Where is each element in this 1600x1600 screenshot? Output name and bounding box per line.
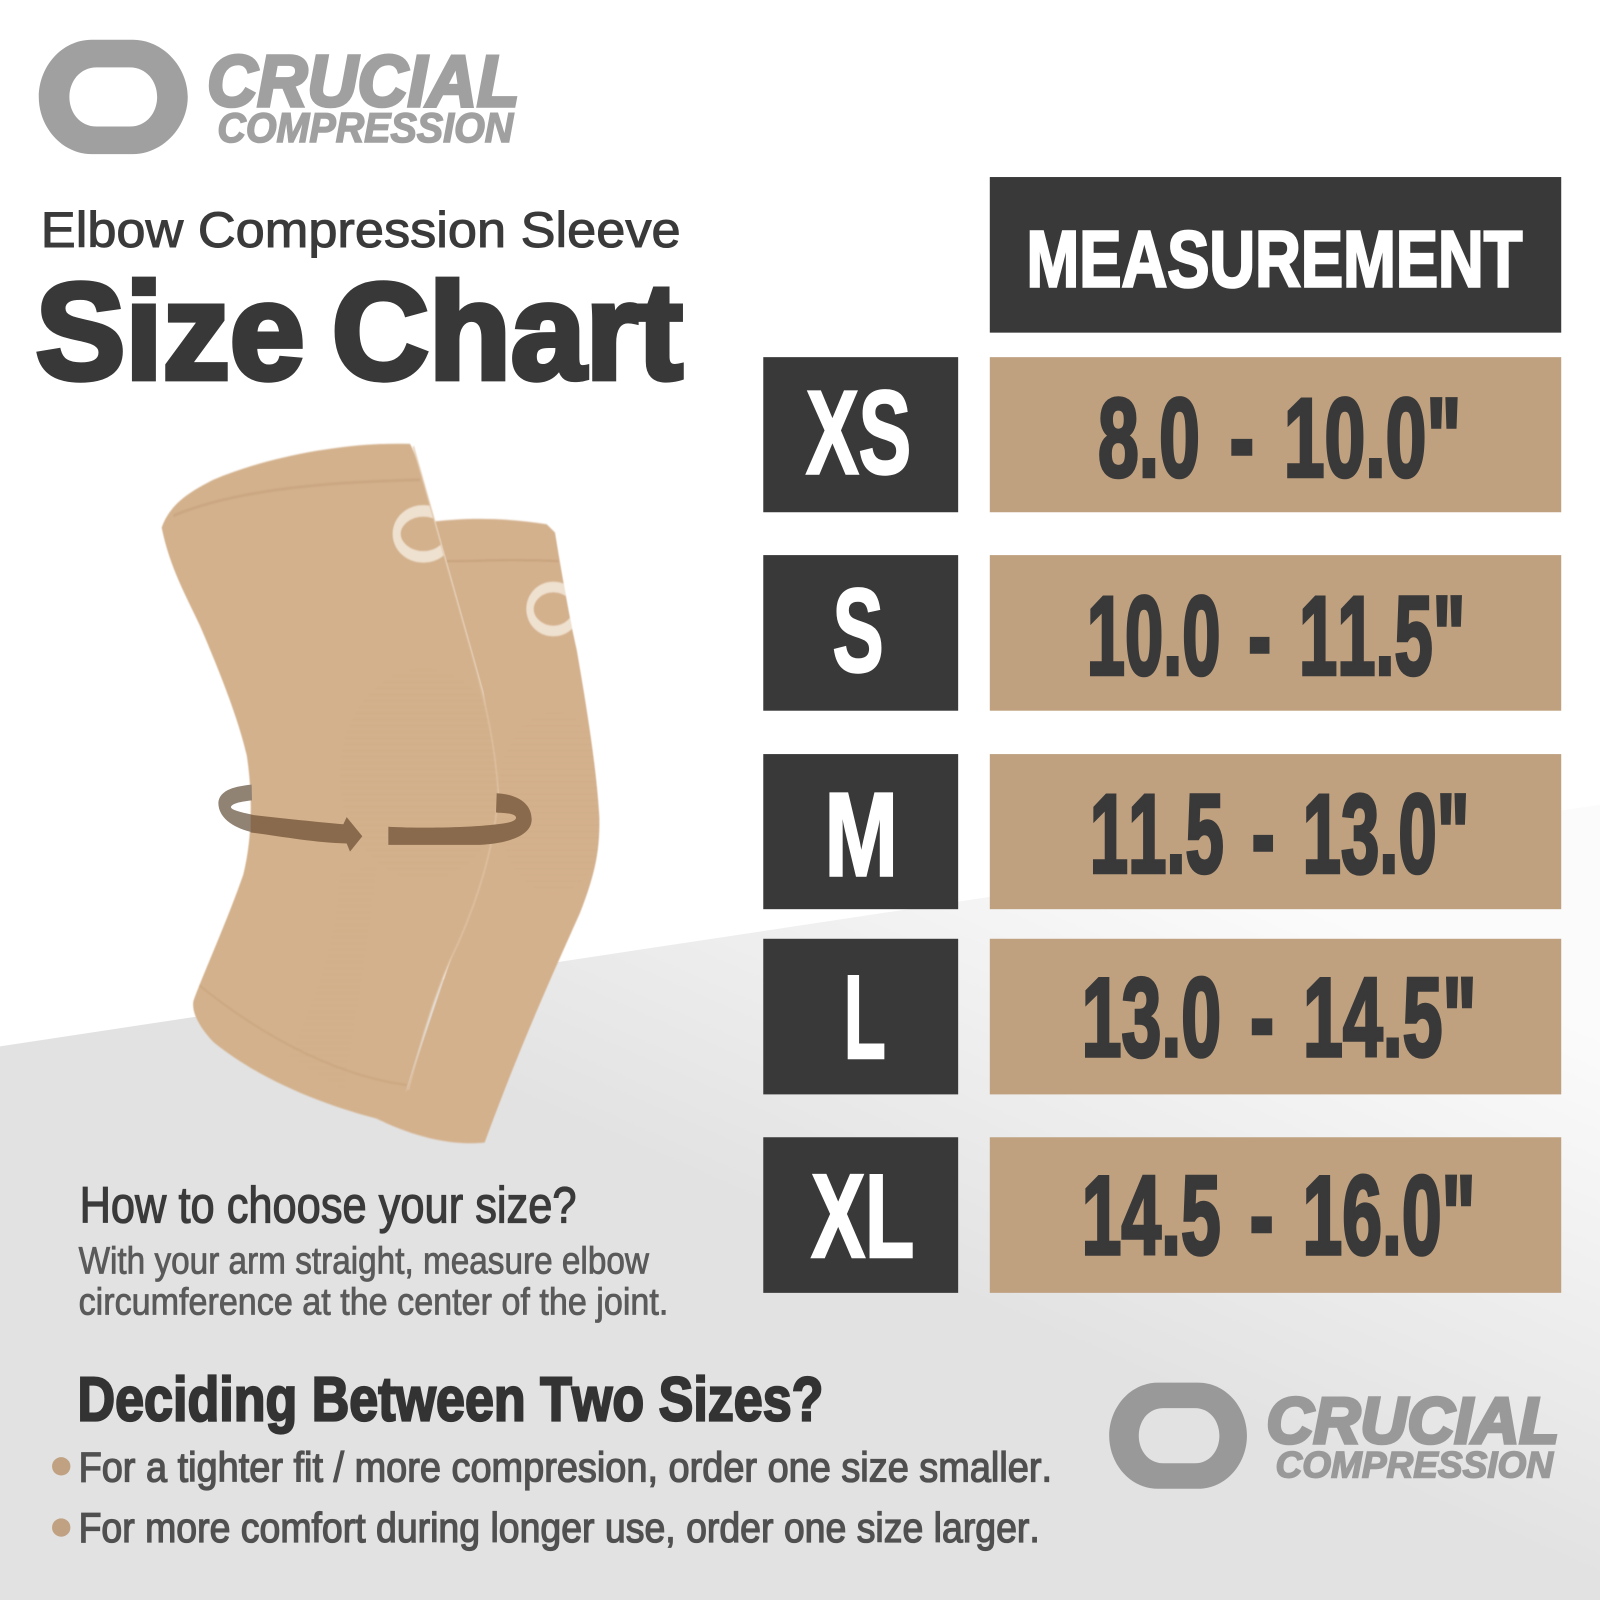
size label L: [763, 939, 958, 1094]
size label XS: XS: [806, 367, 911, 499]
arrow: measuring circumference around the elbow: [218, 785, 532, 852]
bullet 2 marker: [52, 1518, 70, 1537]
measurement M: [990, 754, 1561, 909]
size row: XL: [763, 1137, 1561, 1293]
size label S: S: [833, 565, 884, 697]
front sleeve: [162, 444, 507, 1119]
text block: how to choose your size: [79, 1176, 668, 1322]
logo wordmark: COMPRESSION: COMPRESSION: [1276, 1445, 1555, 1486]
logo wordmark: CRUCIAL: CRUCIAL: [207, 41, 519, 122]
size label S: [763, 555, 958, 711]
subtitle: Elbow Compression Sleeve: Elbow Compression Sleeve: [41, 202, 681, 258]
instruction line 1: With your arm straight, measure elbow: [79, 1239, 650, 1281]
measurement L: [990, 939, 1561, 1094]
logo wordmark: CRUCIAL: CRUCIAL: [1266, 1384, 1559, 1457]
bullet 2 text: For more comfort during longer use, order one size larger.: [79, 1504, 1040, 1551]
size row: M: [763, 754, 1561, 909]
title: Size Chart: Size Chart: [36, 255, 683, 408]
size row: XS: [763, 357, 1561, 512]
back sleeve: [377, 519, 610, 1143]
size label XL: XL: [811, 1151, 914, 1283]
size label M: M: [824, 770, 898, 902]
elbow sleeves product illustration with measuring arrow: [162, 444, 610, 1143]
instruction line 2: circumference at the center of the joint.: [79, 1280, 668, 1322]
heading: deciding between two sizes: Deciding Between Two Sizes?: [78, 1365, 823, 1434]
heading: how to choose: How to choose your size?: [80, 1176, 577, 1233]
icon: back sleeve logo ring: [530, 587, 577, 631]
measurement S: [990, 555, 1561, 711]
size label M: [763, 754, 958, 909]
table header: MEASUREMENT: [990, 177, 1561, 333]
measurement XL: [990, 1137, 1561, 1293]
size label XS: [763, 357, 958, 512]
size row: S: [763, 555, 1561, 711]
size label XL: [763, 1137, 958, 1293]
icon: front sleeve logo ring: [397, 511, 450, 557]
logo: Crucial Compression top left: [39, 40, 519, 154]
bullet 1 marker: [52, 1457, 70, 1476]
bullet 1 text: For a tighter fit / more compresion, order one size smaller.: [79, 1444, 1052, 1491]
icon: logo ring: [1109, 1383, 1247, 1489]
text block: deciding between two sizes: [52, 1365, 1052, 1551]
logo wordmark: COMPRESSION: COMPRESSION: [217, 104, 514, 151]
seam between sleeves: [408, 446, 498, 1090]
size label L: L: [844, 952, 886, 1084]
icon: logo ring: [39, 40, 188, 154]
logo: Crucial Compression bottom right: [1109, 1383, 1559, 1489]
measurement XS: [990, 357, 1561, 512]
size row: L: [763, 939, 1561, 1094]
